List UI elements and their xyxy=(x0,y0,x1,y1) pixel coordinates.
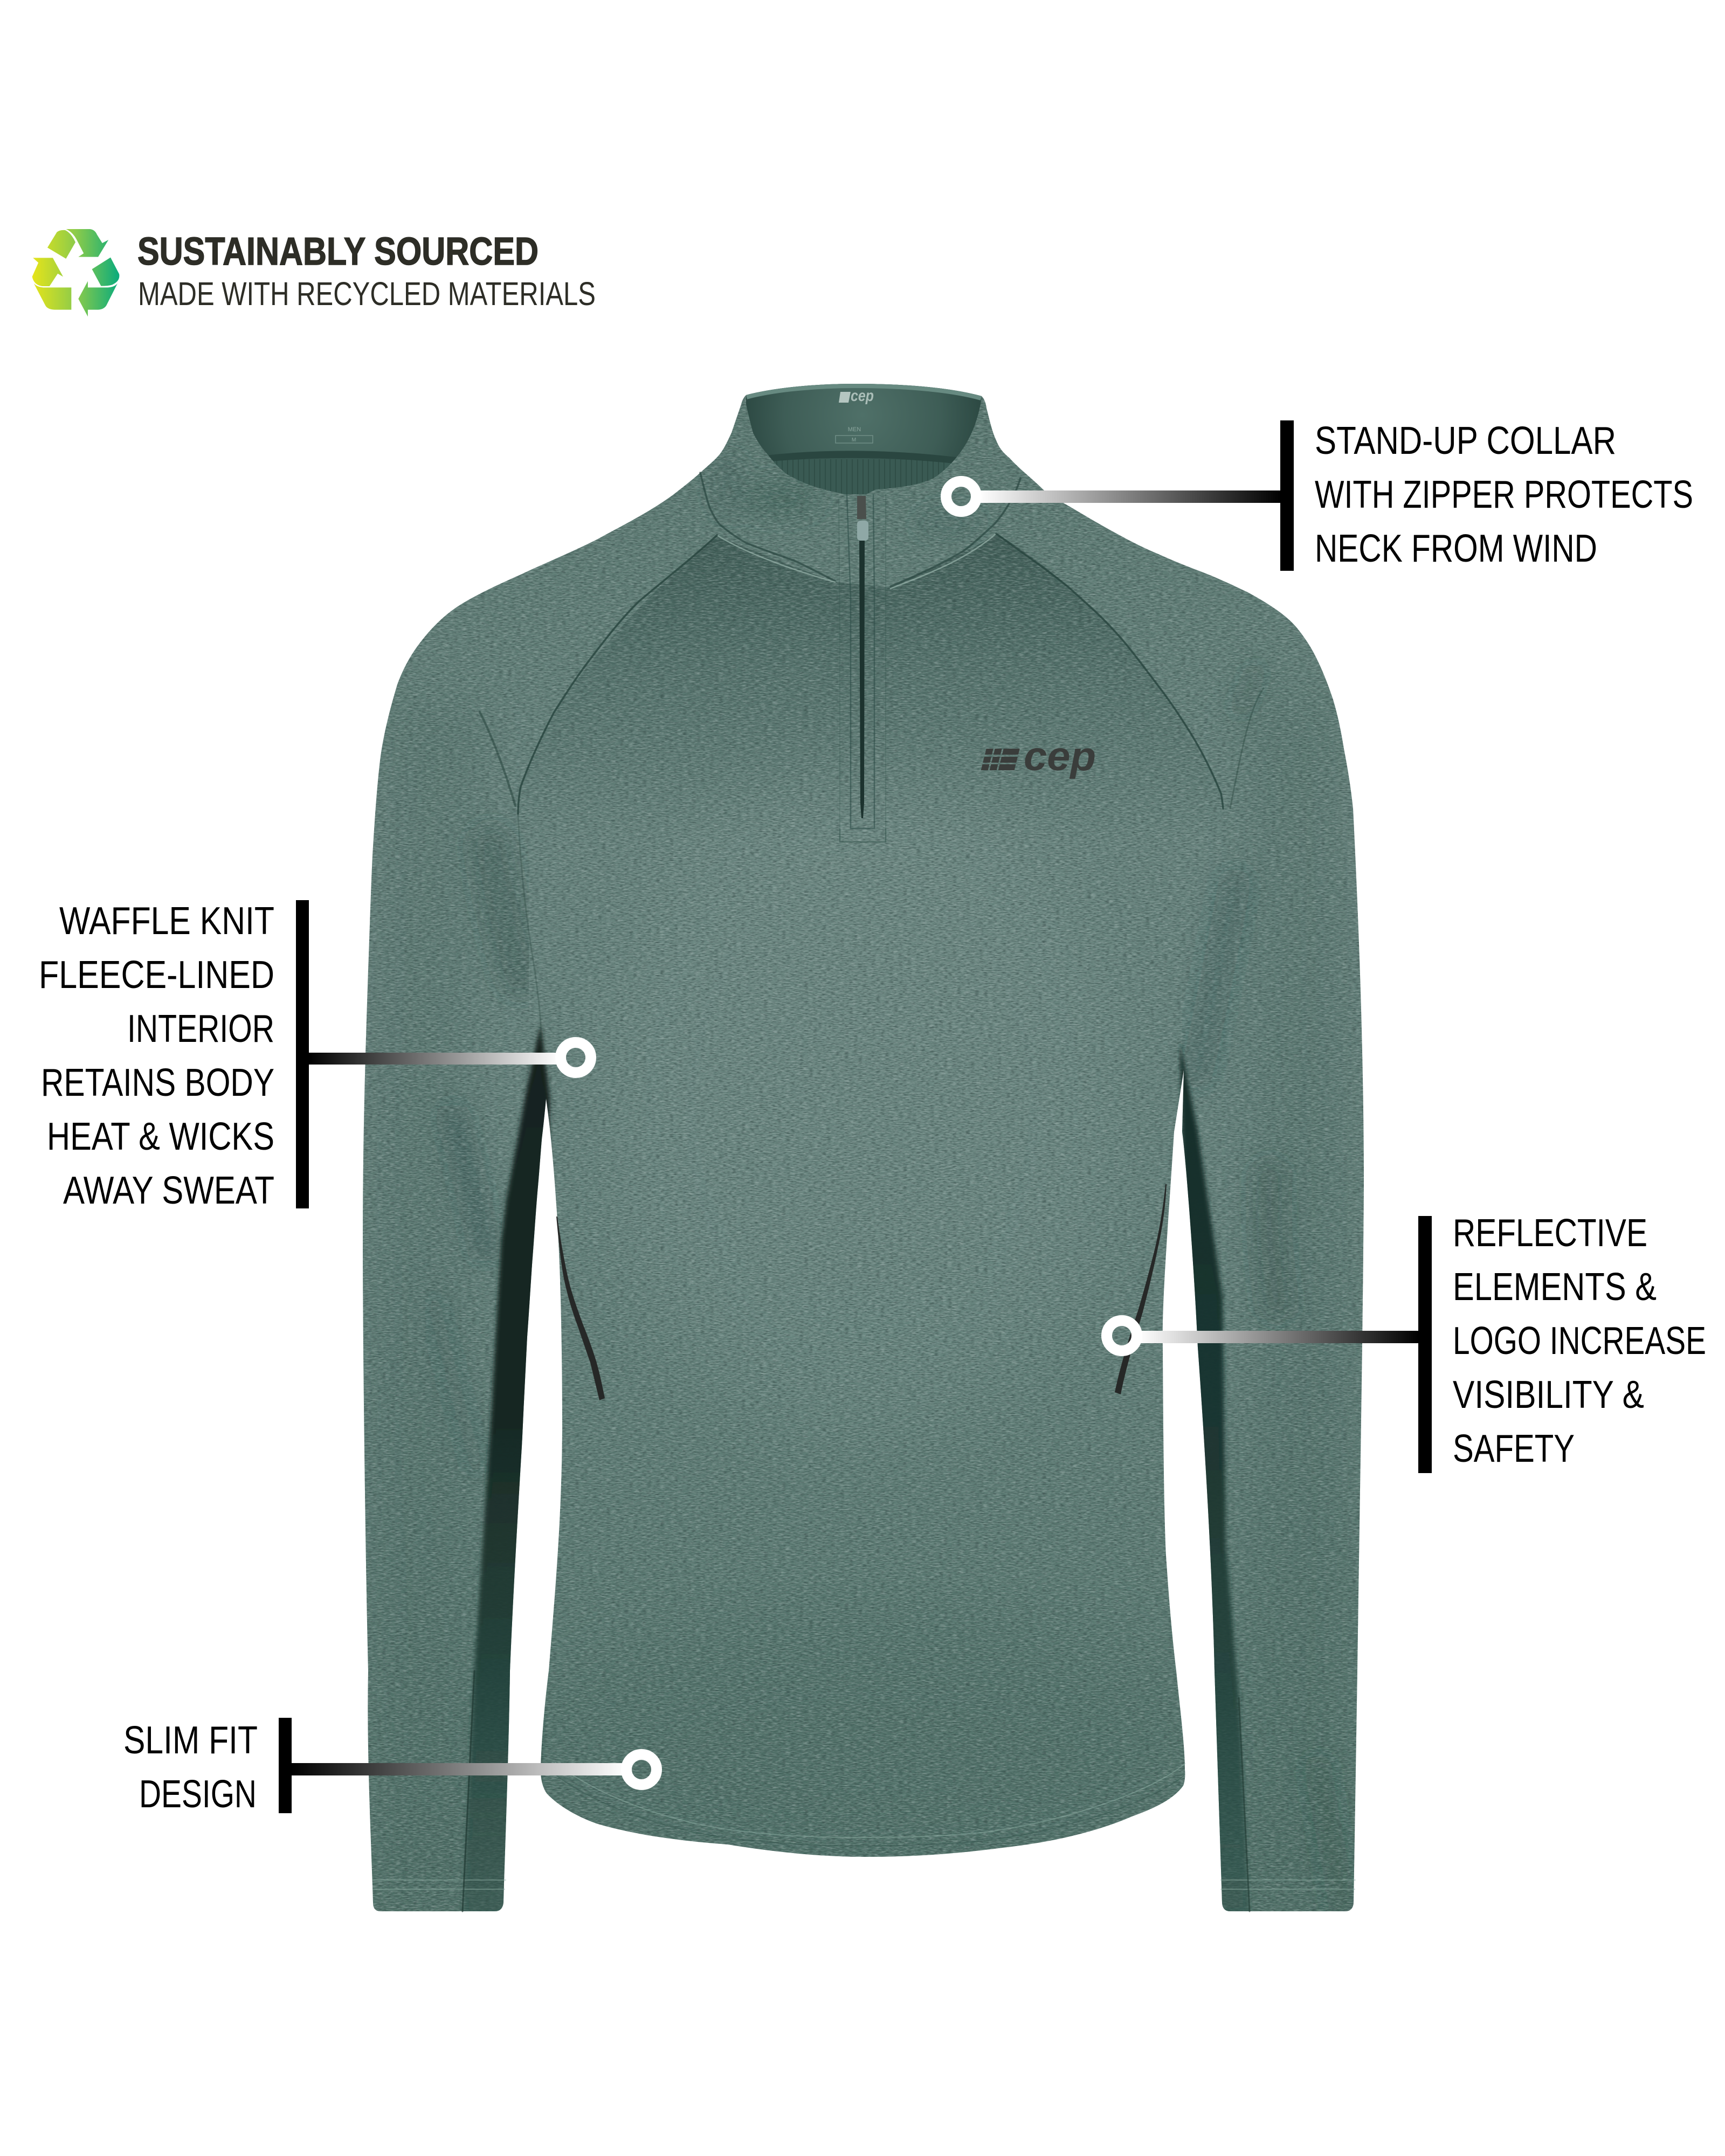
armhole continuation: left xyxy=(518,814,541,1040)
bracket bar xyxy=(1280,420,1294,571)
callout text: RETAINS BODY xyxy=(41,1061,274,1104)
lower-body shadow xyxy=(518,1612,1208,1892)
callout text: ELEMENTS & xyxy=(1453,1265,1657,1309)
fabric texture xyxy=(345,372,1380,1924)
collar outline xyxy=(700,473,835,581)
collar, raglan and hem seams xyxy=(373,473,1355,1911)
right cuff stitching xyxy=(1221,1880,1355,1889)
marker ring xyxy=(561,1042,591,1073)
bracket bar xyxy=(296,900,309,1208)
collar topstitch xyxy=(717,535,835,582)
sleeve pleat: right xyxy=(1230,688,1264,808)
sleeve folds: right xyxy=(1197,668,1342,1908)
badge heading: SUSTAINABLY SOURCED xyxy=(137,230,539,273)
callout text xyxy=(1315,419,1693,570)
callout text: REFLECTIVE xyxy=(1453,1211,1647,1255)
callout text: STAND-UP COLLAR xyxy=(1315,419,1616,462)
callout text: NECK FROM WIND xyxy=(1315,527,1597,570)
reflective strip: left xyxy=(556,1217,605,1400)
right raglan seam xyxy=(996,534,1223,808)
collar rim highlight xyxy=(746,384,982,396)
callout text: SLIM FIT xyxy=(123,1718,258,1762)
callout text xyxy=(1453,1211,1706,1470)
callout text: INTERIOR xyxy=(127,1007,274,1051)
marker ring xyxy=(946,481,976,512)
sleeve pleat: left xyxy=(480,712,515,806)
collar logo: cep xyxy=(851,387,874,405)
callout text: VISIBILITY & xyxy=(1453,1373,1644,1416)
hem stitching xyxy=(555,1763,1185,1837)
size tag xyxy=(836,436,873,443)
bracket bar xyxy=(1418,1216,1432,1473)
bracket bar xyxy=(279,1718,292,1813)
collar logo xyxy=(839,387,874,405)
size tag: M xyxy=(852,437,856,443)
inner rib panel xyxy=(760,458,965,499)
leader line xyxy=(978,490,1281,503)
shirt garment base xyxy=(345,372,1380,1924)
leader line xyxy=(1138,1331,1419,1343)
left cuff stitching xyxy=(373,1880,506,1889)
callout text: AWAY SWEAT xyxy=(63,1169,274,1212)
callout: waffle knit xyxy=(39,899,591,1212)
reflective strip: right xyxy=(1115,1184,1167,1394)
chest logo xyxy=(981,734,1096,779)
callout text xyxy=(123,1718,258,1816)
collar interior xyxy=(739,380,992,499)
badge subheading: MADE WITH RECYCLED MATERIALS xyxy=(138,275,596,312)
leader line xyxy=(292,1763,626,1775)
underarm shadow: right xyxy=(1179,1040,1250,1919)
callout text: FLEECE-LINED xyxy=(39,953,274,997)
leader line xyxy=(309,1053,560,1065)
callout: reflective elements xyxy=(1107,1211,1706,1473)
callout: slim fit xyxy=(123,1718,657,1816)
sleeve folds: left xyxy=(434,846,520,1466)
zipper placket stitching xyxy=(839,494,886,842)
logo grid xyxy=(981,749,1020,770)
chest shadow xyxy=(542,535,1192,742)
callout: stand-up collar xyxy=(946,419,1693,571)
icon: recycling arrows xyxy=(32,229,119,316)
callout text: HEAT & WICKS xyxy=(47,1115,274,1158)
zipper tape xyxy=(859,539,865,818)
callout text: DESIGN xyxy=(139,1772,257,1816)
quarter-zip shirt xyxy=(345,372,1380,1924)
size label: MEN xyxy=(848,426,861,433)
marker ring xyxy=(1107,1321,1137,1351)
marker ring xyxy=(626,1754,657,1785)
sleeve tone xyxy=(420,701,1301,1908)
zipper pull tab xyxy=(857,521,868,541)
underarm shadow: left xyxy=(463,1024,550,1919)
chest highlight xyxy=(604,771,1121,1439)
zipper slider xyxy=(857,496,866,519)
callout text: WAFFLE KNIT xyxy=(59,899,274,943)
collar mottling xyxy=(712,453,981,539)
logo wordmark: cep xyxy=(1024,734,1096,779)
left raglan seam xyxy=(518,535,717,814)
zipper xyxy=(839,494,886,842)
collar rib band xyxy=(760,451,965,465)
badge: sustainably sourced xyxy=(32,229,596,316)
callout text: SAFETY xyxy=(1453,1427,1575,1470)
callout text xyxy=(39,899,274,1212)
